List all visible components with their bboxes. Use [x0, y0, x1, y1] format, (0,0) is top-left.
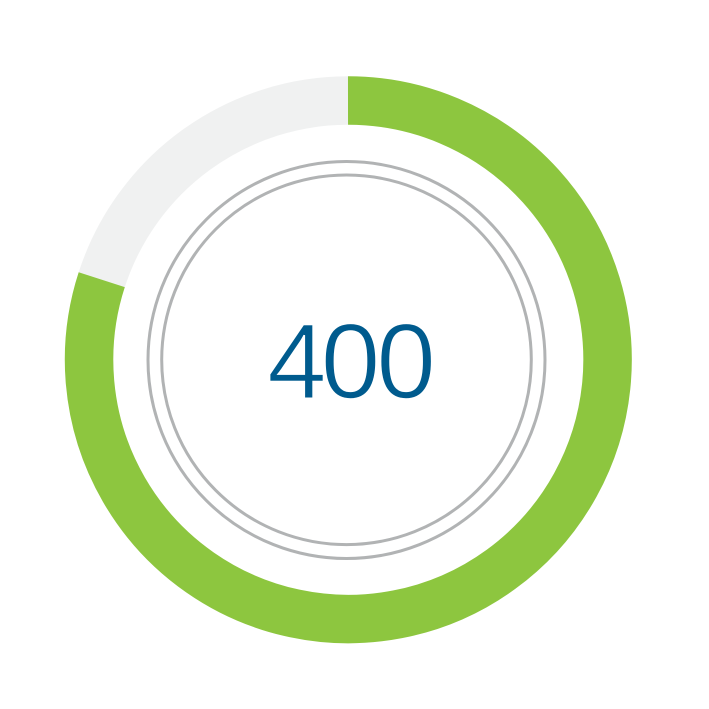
center value: 0: [321, 301, 380, 421]
outer thin ring: [148, 162, 545, 558]
donut track: remaining portion: [102, 101, 348, 280]
inner thin ring: [162, 175, 531, 545]
center value: 4: [267, 301, 327, 421]
center value: 0: [376, 301, 436, 421]
donut arc: completed portion: [89, 101, 608, 619]
